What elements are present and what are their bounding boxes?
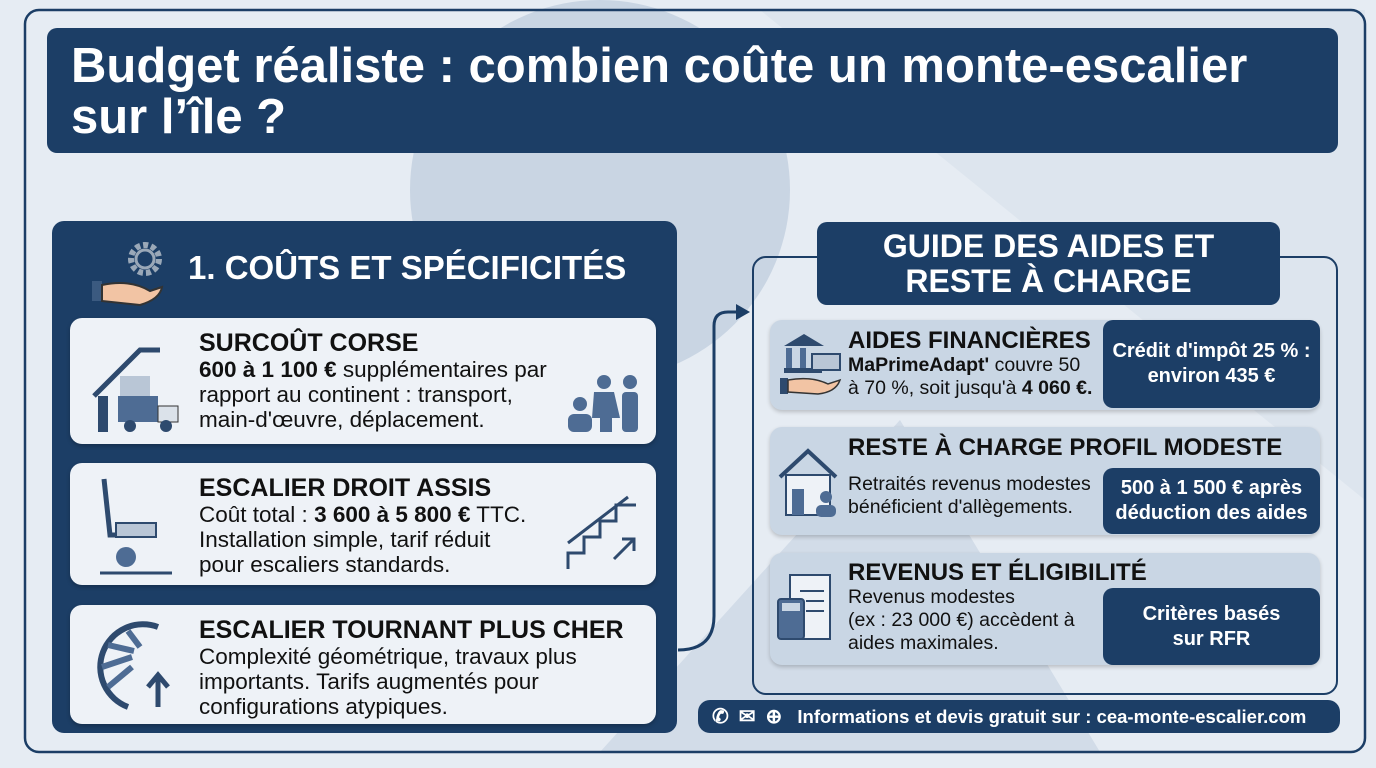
icon: stair chair bbox=[100, 478, 172, 574]
text: REVENUS ET ÉLIGIBILITÉ bbox=[848, 559, 1147, 586]
callout: crédit d'impôt bbox=[1103, 320, 1320, 408]
section heading: 1. COÛTS ET SPÉCIFICITÉS bbox=[188, 249, 626, 286]
text: main-d'œuvre, déplacement. bbox=[199, 407, 485, 432]
footer: contact bbox=[698, 700, 1340, 733]
text: Installation simple, tarif réduit bbox=[199, 527, 490, 552]
text bbox=[848, 326, 1092, 399]
callout: crédit d'impôt: environ 435 € bbox=[1148, 365, 1275, 387]
text: Coût total : 3 600 à 5 800 € TTC. bbox=[199, 502, 526, 527]
callout: 500 à 1500: déduction des aides bbox=[1115, 502, 1308, 524]
callout: critères RFR: sur RFR bbox=[1173, 628, 1250, 650]
icon: bank and money bbox=[780, 334, 842, 395]
text bbox=[199, 328, 547, 432]
text: importants. Tarifs augmentés pour bbox=[199, 669, 539, 694]
heading: guide des aides: GUIDE DES AIDES ET bbox=[883, 228, 1214, 264]
icon: stairs and truck bbox=[92, 348, 178, 432]
icon: people bbox=[568, 375, 638, 432]
heading: guide des aides bbox=[817, 222, 1280, 305]
callout: crédit d'impôt: Crédit d'impôt 25 % : bbox=[1112, 340, 1311, 362]
callout: 500 à 1500: 500 à 1 500 € après bbox=[1121, 477, 1302, 499]
title: sur l’île ? bbox=[71, 90, 286, 144]
icon: stairs arrow up bbox=[566, 496, 636, 569]
text: MaPrimeAdapt' couvre 50 bbox=[848, 354, 1080, 376]
icon: house bbox=[778, 448, 838, 517]
text bbox=[848, 434, 1282, 518]
card: surcoût corse bbox=[70, 318, 656, 444]
panel: coûts et spécificités bbox=[52, 221, 677, 733]
text: (ex : 23 000 €) accèdent à bbox=[848, 609, 1075, 631]
footer: contact: ✆✉⊕ Informations et devis gratuit sur : cea-monte-escalier.com bbox=[712, 706, 1306, 728]
heading: guide des aides: RESTE À CHARGE bbox=[905, 263, 1192, 299]
callout: critères RFR: Critères basés bbox=[1143, 602, 1280, 624]
icon: gear and hand bbox=[92, 242, 164, 306]
text: SURCOÛT CORSE bbox=[199, 329, 418, 357]
text: à 70 %, soit jusqu'à 4 060 €. bbox=[848, 377, 1092, 399]
card: escalier droit assis bbox=[70, 463, 656, 585]
title bbox=[47, 28, 1338, 153]
text: ESCALIER TOURNANT PLUS CHER bbox=[199, 616, 624, 644]
text: configurations atypiques. bbox=[199, 694, 448, 719]
card: reste à charge bbox=[770, 427, 1320, 535]
text: AIDES FINANCIÈRES bbox=[848, 327, 1091, 354]
text: pour escaliers standards. bbox=[199, 552, 450, 577]
card: revenus et éligibilité bbox=[770, 553, 1320, 665]
panel: guide des aides bbox=[752, 256, 1338, 695]
card: aides financières bbox=[770, 320, 1320, 410]
icon: spiral stair bbox=[97, 621, 170, 710]
text: Complexité géométrique, travaux plus bbox=[199, 644, 577, 669]
title: Budget réaliste : combien coûte un monte-escalier bbox=[71, 39, 1247, 93]
arrow: connector bbox=[678, 304, 750, 652]
text bbox=[848, 558, 1147, 654]
card: escalier tournant bbox=[70, 605, 656, 724]
text: 600 à 1 100 € supplémentaires par bbox=[199, 357, 547, 382]
text: rapport au continent : transport, bbox=[199, 382, 513, 407]
callout: 500 à 1500 bbox=[1103, 468, 1320, 534]
text: Revenus modestes bbox=[848, 586, 1015, 608]
callout: critères RFR bbox=[1103, 588, 1320, 665]
text: bénéficient d'allègements. bbox=[848, 496, 1073, 518]
text: Retraités revenus modestes bbox=[848, 473, 1091, 495]
text: aides maximales. bbox=[848, 632, 999, 654]
text: RESTE À CHARGE PROFIL MODESTE bbox=[848, 434, 1282, 461]
text bbox=[199, 616, 624, 719]
icon: document and calculator bbox=[777, 574, 831, 640]
text: ESCALIER DROIT ASSIS bbox=[199, 474, 491, 502]
text bbox=[199, 474, 526, 577]
